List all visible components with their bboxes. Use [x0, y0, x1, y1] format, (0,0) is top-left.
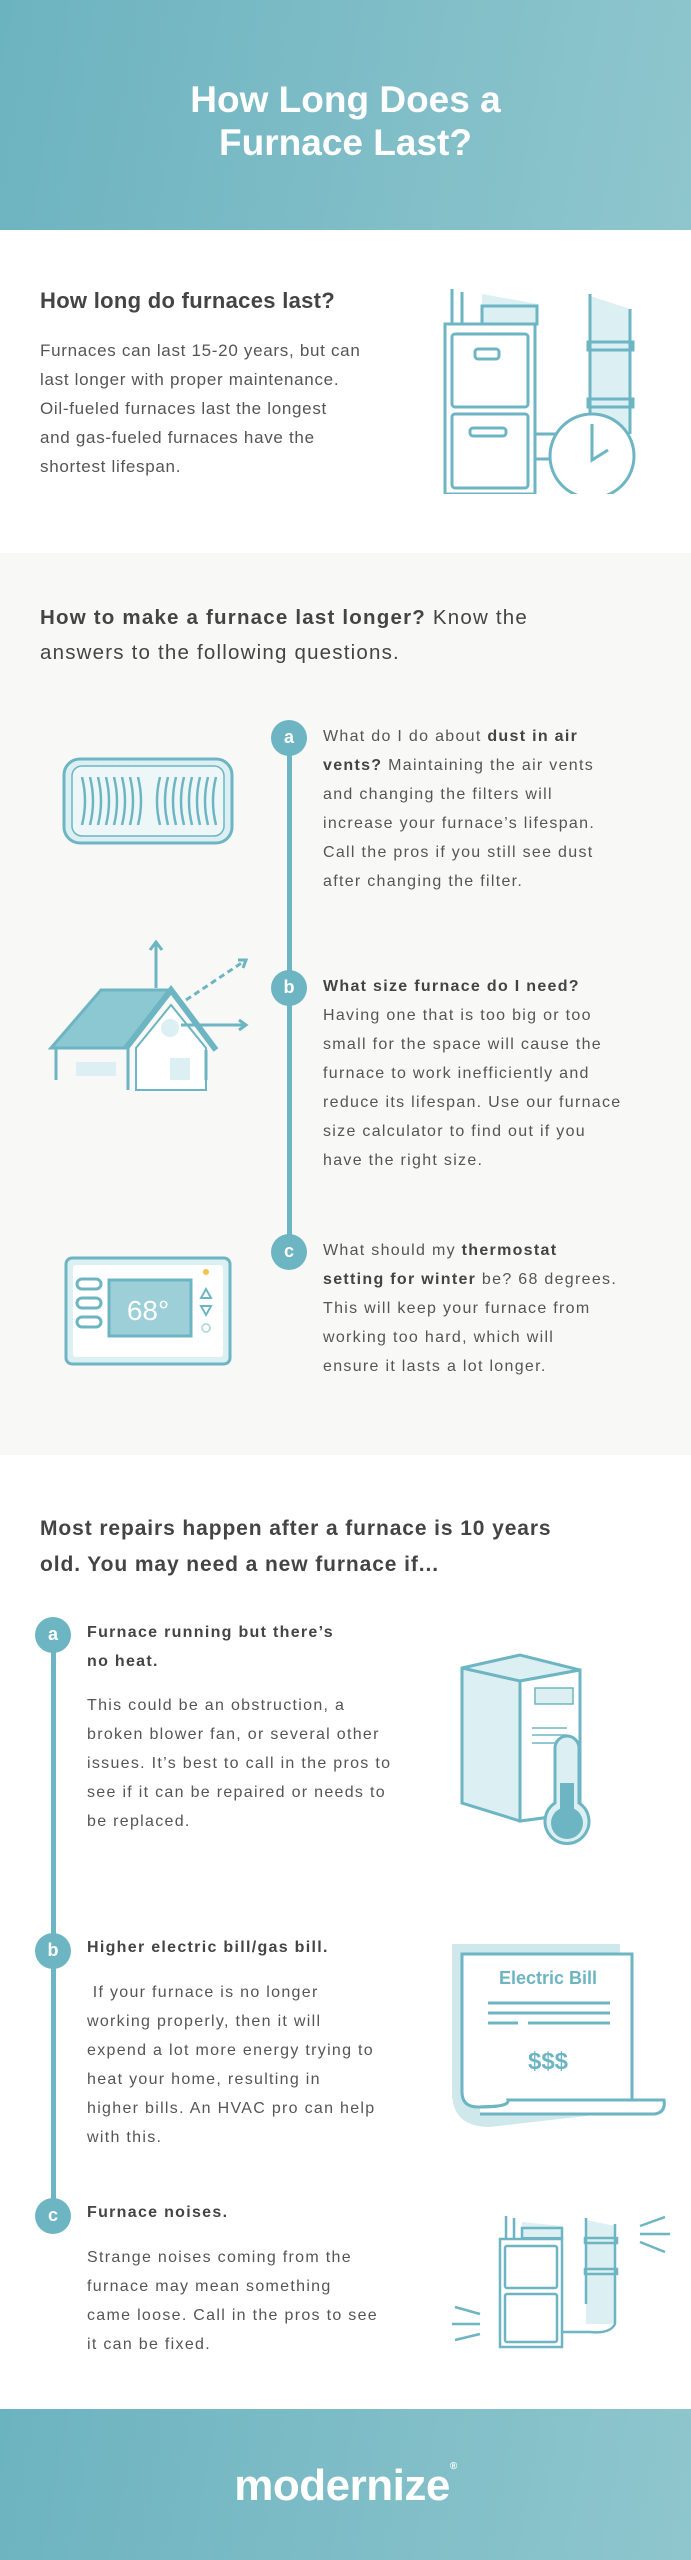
marker c: c [48, 2205, 58, 2225]
question b text: size calculator to find out if you [323, 1123, 586, 1140]
question c text [323, 1242, 617, 1375]
question a text: Call the pros if you still see dust [323, 844, 594, 861]
question c text: This will keep your furnace from [323, 1300, 590, 1317]
sign a: This could be an obstruction, a [87, 1697, 345, 1714]
question a text: and changing the filters will [323, 786, 553, 803]
icon: furnace with clock [444, 289, 636, 494]
icon: air vent [62, 758, 234, 844]
marker b: b [48, 1940, 58, 1960]
question b text: furnace to work inefficiently and [323, 1065, 590, 1082]
question a text: increase your furnace’s lifespan. [323, 815, 595, 832]
logo: modernize® [234, 2461, 457, 2510]
sign a [87, 1624, 391, 1830]
icon: electric bill: $$$ [528, 2048, 569, 2075]
section 1 text: shortest lifespan. [40, 457, 181, 476]
section 3 heading [40, 1517, 552, 1576]
icon: electric bill [452, 1944, 666, 2127]
icon: electric bill: Electric Bill [499, 1968, 597, 1988]
question b text: have the right size. [323, 1152, 483, 1169]
icon: house with arrows [48, 940, 248, 1091]
sign c: came loose. Call in the pros to see [87, 2307, 378, 2324]
section 2 heading: answers to the following questions. [40, 641, 400, 664]
header banner [0, 0, 691, 230]
title [190, 79, 501, 163]
sign b: working properly, then it will [87, 2013, 321, 2030]
section 3 heading: Most repairs happen after a furnace is 10 years [40, 1517, 552, 1540]
sign c: Furnace noises. [87, 2204, 228, 2221]
question c text: setting for winter be? 68 degrees. [323, 1271, 617, 1288]
section 2 heading: How to make a furnace last longer? Know the [40, 606, 528, 629]
sign a: Furnace running but there’s [87, 1624, 334, 1641]
sign a: no heat. [87, 1653, 159, 1670]
marker a [35, 1617, 71, 1653]
marker a: a [284, 727, 294, 747]
marker c [35, 2198, 71, 2234]
question a text: after changing the filter. [323, 873, 523, 890]
section 2 heading [40, 606, 528, 664]
title: Furnace Last? [219, 122, 472, 163]
question c text: working too hard, which will [323, 1329, 554, 1346]
question c text: ensure it lasts a lot longer. [323, 1358, 547, 1375]
question a text [323, 728, 595, 890]
question a text: What do I do about dust in air [323, 728, 578, 745]
question b text: reduce its lifespan. Use our furnace [323, 1094, 622, 1111]
icon: thermostat 68 [64, 1256, 232, 1366]
question b text: What size furnace do I need? [323, 978, 580, 995]
question b text: Having one that is too big or too [323, 1007, 592, 1024]
section 1 text: Oil-fueled furnaces last the longest [40, 399, 327, 418]
question c text: What should my thermostat [323, 1242, 557, 1259]
sign a: broken blower fan, or several other [87, 1726, 380, 1743]
question b text [323, 978, 622, 1169]
section 1 text: and gas-fueled furnaces have the [40, 428, 315, 447]
sign b [87, 1939, 375, 2146]
marker c: c [284, 1241, 294, 1261]
sign c: Strange noises coming from the [87, 2249, 352, 2266]
section 2 background [0, 553, 691, 1455]
sign b: with this. [87, 2129, 162, 2146]
sign c: it can be fixed. [87, 2336, 211, 2353]
timeline line 2 [51, 1635, 56, 2216]
question b text: small for the space will cause the [323, 1036, 602, 1053]
sign a: be replaced. [87, 1813, 191, 1830]
title: How Long Does a [190, 79, 501, 120]
sign c [87, 2204, 378, 2353]
sign b: heat your home, resulting in [87, 2071, 321, 2088]
timeline line [287, 738, 292, 1252]
sign a: see if it can be repaired or needs to [87, 1784, 386, 1801]
sign b: Higher electric bill/gas bill. [87, 1939, 329, 1956]
marker b [35, 1933, 71, 1969]
section 3 heading: old. You may need a new furnace if... [40, 1553, 439, 1576]
section 1 heading: How long do furnaces last? [40, 288, 335, 313]
sign b: higher bills. An HVAC pro can help [87, 2100, 375, 2117]
icon: furnace with thermometer [460, 1654, 590, 1845]
footer [0, 2409, 691, 2560]
section 1 text [40, 341, 360, 476]
section 1 text: Furnaces can last 15-20 years, but can [40, 341, 360, 360]
section 1 text: last longer with proper maintenance. [40, 370, 339, 389]
sign a: issues. It’s best to call in the pros to [87, 1755, 391, 1772]
marker b: b [284, 977, 294, 997]
icon: noisy furnace [452, 2216, 670, 2348]
marker c [271, 1234, 307, 1270]
icon: thermostat 68: 68° [127, 1295, 169, 1326]
sign b: expend a lot more energy trying to [87, 2042, 374, 2059]
marker b [271, 970, 307, 1006]
sign c: furnace may mean something [87, 2278, 332, 2295]
marker a [271, 720, 307, 756]
marker a: a [48, 1624, 58, 1644]
sign b: If your furnace is no longer [93, 1984, 319, 2001]
question a text: vents? Maintaining the air vents [323, 757, 594, 774]
